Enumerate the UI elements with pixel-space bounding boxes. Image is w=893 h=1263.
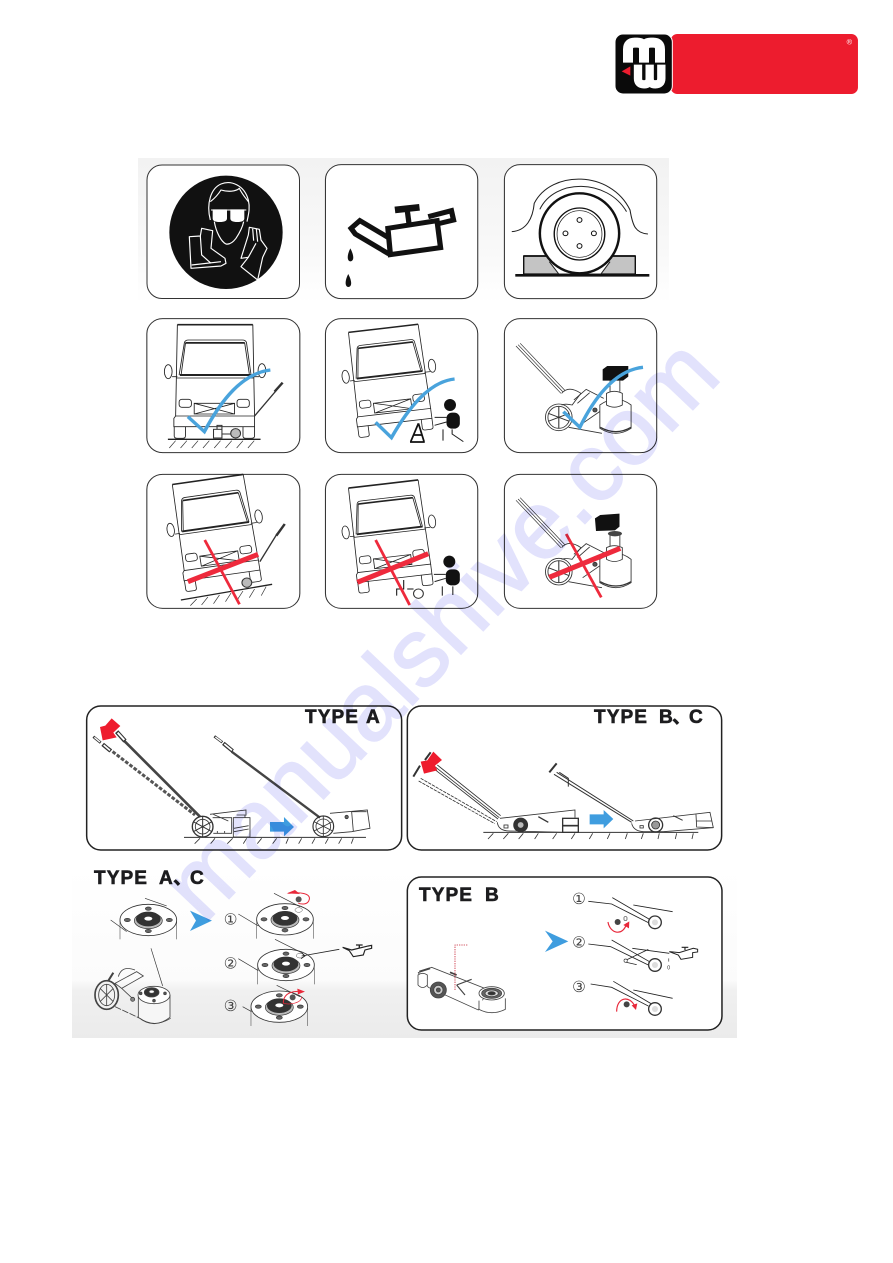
red cross	[188, 540, 258, 604]
red arrow	[421, 752, 442, 774]
panel: do not work without support	[325, 474, 478, 608]
panel: protective equipment	[147, 165, 300, 298]
jack lowered with handle	[214, 736, 370, 837]
person	[435, 399, 463, 442]
jack illustration: TYPE B	[418, 945, 505, 1013]
check mark	[563, 367, 643, 427]
check mark	[188, 370, 270, 432]
jack in raised position with pumping handle	[93, 732, 250, 837]
panel: TYPE B, C release valve	[407, 706, 722, 850]
step 3	[224, 985, 308, 1026]
panel: TYPE B oil filling	[407, 877, 722, 1030]
panel: do not load off-center	[504, 474, 657, 608]
heading: TYPE A, C: 、	[173, 868, 193, 889]
heading: TYPE B, C: B	[659, 707, 674, 728]
jack with pumping handle	[413, 752, 578, 832]
background band: oil filling section	[72, 868, 737, 1038]
step 1: ①	[224, 911, 238, 929]
step 2: ②	[224, 954, 238, 972]
step 3: ③	[572, 978, 586, 996]
heading: TYPE B, C: C	[689, 707, 704, 728]
jack illustration: TYPE A, C	[95, 968, 171, 1024]
step 1: ①	[572, 890, 586, 908]
ground	[184, 837, 366, 844]
logo letter w	[638, 65, 661, 84]
check mark	[376, 379, 455, 438]
panel: do not jack on slope	[147, 473, 300, 608]
blue chevron	[190, 911, 212, 931]
panel: TYPE A release valve	[87, 706, 402, 850]
blue chevron	[545, 931, 568, 952]
logo: MW brand badge	[615, 34, 858, 94]
section: TYPE A, C oil filling	[111, 890, 372, 1026]
red cross	[549, 534, 620, 597]
red dotted leader	[455, 945, 467, 990]
step 2: ②	[572, 933, 586, 951]
watermark: manualshive.com	[140, 317, 739, 939]
heading: TYPE B, C: 、	[672, 707, 692, 728]
logo letter m	[628, 43, 660, 63]
heading: TYPE B, C: TYPE	[594, 707, 648, 728]
step 2	[224, 939, 372, 984]
blue arrow	[590, 810, 613, 828]
heading: TYPE A, C: A	[159, 868, 174, 889]
heading: TYPE B: B	[485, 885, 500, 906]
panel: supported with axle stand	[325, 319, 478, 453]
background band: safety pictograms	[138, 158, 669, 303]
row 3 pictograms: incorrect usage	[147, 473, 657, 608]
step 1	[572, 890, 673, 932]
heading: TYPE B: TYPE	[419, 885, 473, 906]
step 2	[572, 933, 698, 971]
panel: correct jacking on level ground	[147, 319, 300, 453]
step 3	[572, 978, 673, 1015]
ground	[483, 832, 698, 839]
red cross	[357, 540, 428, 605]
base flange view	[111, 898, 177, 986]
heading: TYPE A: A	[366, 707, 381, 728]
heading: TYPE A: TYPE	[305, 707, 359, 728]
logo black badge	[615, 34, 672, 94]
heading: TYPE A, C: TYPE	[94, 868, 148, 889]
panel: load centered on jack	[504, 319, 657, 453]
row 1 pictograms	[87, 165, 739, 1030]
step 1	[224, 890, 313, 939]
panel: hydraulic oil can	[325, 165, 478, 299]
row 2 pictograms: correct usage	[147, 319, 657, 453]
logo red pointer	[622, 66, 630, 76]
red arrow	[100, 718, 120, 740]
logo red banner	[671, 34, 858, 94]
panel: wheel chocks	[504, 165, 657, 299]
step 3: ③	[224, 997, 238, 1015]
registered mark: ®	[847, 37, 853, 46]
jack lowered with handle	[549, 763, 713, 832]
blue arrow	[270, 817, 294, 836]
heading: TYPE A, C: C	[190, 868, 205, 889]
person	[434, 556, 460, 596]
